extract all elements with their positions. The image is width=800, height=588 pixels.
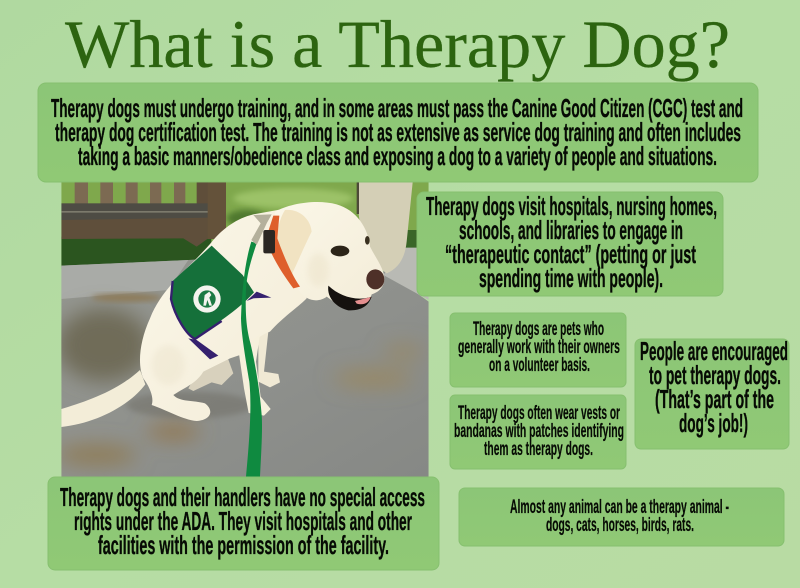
- leash: [241, 242, 262, 477]
- column: [357, 182, 413, 273]
- panel: access rights: rights under the ADA. They visit hospitals and other: [74, 506, 412, 536]
- panel: vests and bandanas: Therapy dogs often wear vests or: [458, 403, 620, 424]
- panel: access rights: [48, 477, 439, 570]
- ear: [277, 210, 312, 282]
- panel: other animals: [459, 488, 784, 546]
- collar: [263, 216, 300, 288]
- panel: access rights: facilities with the permission of the facility.: [98, 530, 389, 560]
- panel: vests and bandanas: them as therapy dogs.: [484, 439, 593, 460]
- ground shadow: [127, 392, 253, 418]
- muzzle shading: [310, 256, 327, 284]
- title: What is a Therapy Dog?: [65, 6, 730, 82]
- panel: pets and volunteers: on a volunteer basis.: [489, 355, 590, 376]
- body shading: [155, 348, 181, 382]
- leash clip: [251, 214, 272, 245]
- head: [275, 202, 384, 309]
- vest patch: [193, 285, 221, 313]
- dog body: [140, 208, 307, 421]
- panel: pets and volunteers: Therapy dogs are pets who: [473, 319, 604, 340]
- nose: [366, 269, 384, 289]
- panel: vests and bandanas: [450, 395, 626, 469]
- panel: vests and bandanas: bandanas with patches identifying: [454, 421, 624, 442]
- panel: pets and volunteers: [450, 313, 626, 387]
- concrete floor: [57, 248, 429, 477]
- panel: pets and volunteers: generally work with their owners: [458, 337, 620, 358]
- photo: therapy dog in green vest: [57, 182, 429, 477]
- panel: access rights: Therapy dogs and their handlers have no special access: [60, 482, 425, 512]
- grass: [61, 182, 429, 269]
- bench: [61, 182, 226, 247]
- panel: training: [38, 83, 758, 182]
- far legs: [188, 332, 280, 391]
- panel: therapeutic contact: [417, 191, 723, 296]
- near front leg: [239, 334, 271, 416]
- tail: [61, 370, 145, 427]
- eyes: [331, 236, 370, 256]
- mouth: [328, 286, 372, 310]
- vest: [171, 246, 271, 359]
- panel: petting encouraged: [635, 336, 789, 449]
